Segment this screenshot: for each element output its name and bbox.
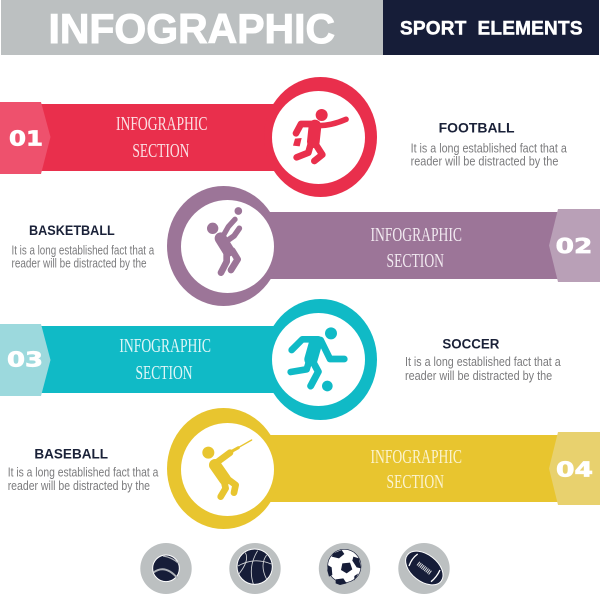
text: baseball: BASEBALL bbox=[34, 446, 108, 461]
panel: soccer band bbox=[0, 299, 377, 420]
section label 01: SECTION bbox=[132, 141, 189, 162]
section label 04: SECTION bbox=[386, 472, 444, 493]
panel: baseball band bbox=[167, 408, 600, 529]
panel: football band bbox=[0, 77, 377, 197]
section label 04 bbox=[370, 447, 462, 493]
text: football: FOOTBALL bbox=[439, 120, 515, 135]
section label 04: INFOGRAPHIC bbox=[370, 447, 462, 468]
text: basketball: reader will be distracted by the bbox=[12, 256, 147, 270]
icon: basketball bbox=[229, 543, 281, 594]
text: basketball bbox=[12, 223, 154, 270]
text: basketball: BASKETBALL bbox=[29, 223, 115, 238]
text: soccer bbox=[405, 336, 561, 383]
subtitle: SPORT ELEMENTS bbox=[400, 18, 582, 39]
icon: american football bbox=[398, 543, 450, 594]
icon: baseball player bbox=[202, 440, 252, 497]
number 03: 03 bbox=[7, 348, 43, 372]
section label 02: SECTION bbox=[386, 251, 444, 272]
icon: soccer player bbox=[291, 327, 344, 391]
icon: soccer ball bbox=[319, 543, 370, 594]
text: football: It is a long established fact that a bbox=[411, 141, 567, 155]
text: soccer: reader will be distracted by the bbox=[405, 369, 552, 383]
icon row: sport balls bbox=[140, 543, 450, 594]
icon: football player bbox=[293, 109, 346, 161]
number 01: 01 bbox=[9, 126, 43, 150]
text: football: reader will be distracted by the bbox=[411, 155, 558, 169]
text: baseball: It is a long established fact that a bbox=[8, 466, 158, 480]
section label 02 bbox=[370, 225, 462, 272]
icon: basketball player bbox=[207, 207, 242, 273]
text: soccer: SOCCER bbox=[442, 336, 500, 351]
text: baseball: reader will be distracted by the bbox=[8, 479, 150, 493]
section label 01 bbox=[116, 114, 208, 162]
section label 03: SECTION bbox=[136, 363, 192, 384]
section label 03 bbox=[119, 336, 211, 384]
text: soccer: It is a long established fact that a bbox=[405, 355, 561, 369]
number 04: 04 bbox=[556, 458, 593, 482]
section label 01: INFOGRAPHIC bbox=[116, 114, 208, 135]
text: basketball: It is a long established fact that a bbox=[12, 244, 154, 258]
icon: baseball bbox=[140, 543, 192, 594]
text: football bbox=[411, 120, 567, 169]
text: baseball bbox=[8, 446, 158, 493]
header bbox=[1, 0, 599, 55]
number 02: 02 bbox=[556, 234, 592, 258]
section label 02: INFOGRAPHIC bbox=[370, 225, 462, 246]
title: INFOGRAPHIC bbox=[48, 5, 335, 52]
panel: basketball band bbox=[167, 186, 600, 306]
section label 03: INFOGRAPHIC bbox=[119, 336, 211, 357]
